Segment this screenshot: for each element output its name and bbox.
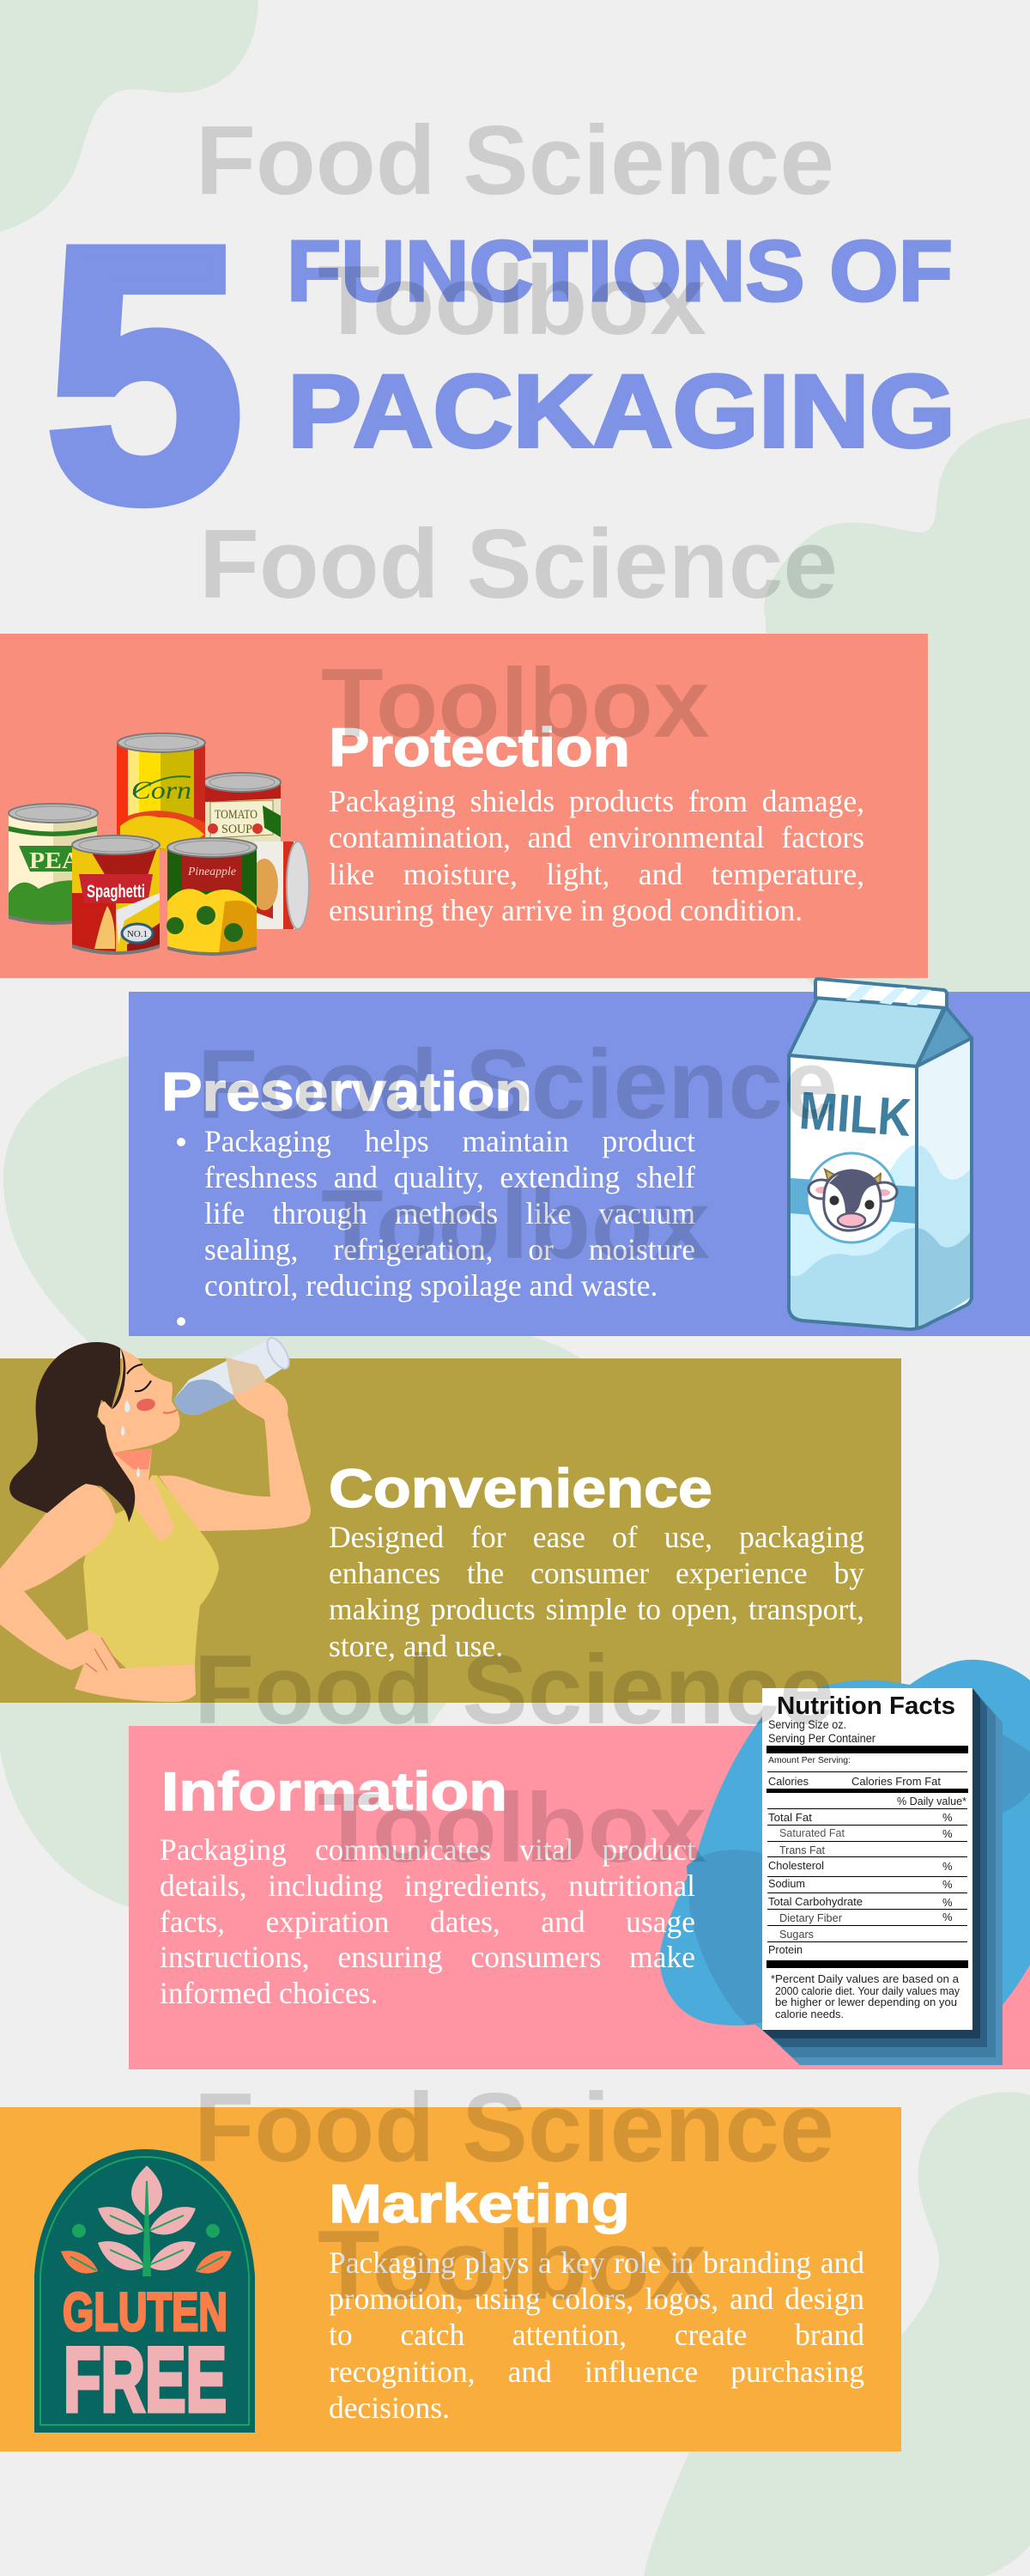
water bottle <box>173 1339 288 1415</box>
icon: gluten free badge <box>34 2149 255 2433</box>
icon: woman drinking from bottle <box>0 1337 311 1702</box>
label rows <box>768 1718 966 1956</box>
title line 2: PACKAGING <box>288 354 955 469</box>
bullet <box>177 1138 185 1146</box>
peas can <box>9 804 98 925</box>
watermark 9: Food Science <box>194 2074 834 2183</box>
watermark 7: Food Science <box>194 1636 834 1745</box>
body text: information: instructions, ensuring consumers make <box>160 1940 695 1974</box>
label title: Nutrition Facts <box>777 1692 955 1720</box>
body text: protection: contamination, and environmental factors <box>329 820 864 854</box>
label rows: Saturated Fat <box>779 1826 845 1839</box>
body text: preservation: life through methods like vacuum <box>204 1196 695 1230</box>
body text: preservation: control, reducing spoilage and waste. <box>204 1268 657 1303</box>
watermark 2: Toolbox <box>318 246 706 355</box>
mouth <box>163 1410 177 1413</box>
plant <box>61 2166 232 2276</box>
label rows: Calories <box>768 1775 809 1788</box>
label footnote: 2000 calorie diet. Your daily values may <box>775 1985 960 1997</box>
cheek <box>136 1397 156 1413</box>
FREE text: FREE <box>64 2328 227 2431</box>
panel: marketing <box>0 2107 901 2451</box>
watermark 8: Toolbox <box>318 1774 706 1883</box>
label footnote: calorie needs. <box>775 2008 844 2020</box>
peas can: PEAS <box>29 848 94 873</box>
body text: marketing: to catch attention, create brand <box>329 2318 864 2352</box>
label rows: Serving Per Container <box>768 1732 876 1745</box>
label card <box>762 1688 972 2030</box>
body text: information <box>160 1832 695 2010</box>
label rows: Cholesterol <box>768 1859 824 1872</box>
label footnote: be higher or lewer depending on you <box>775 1996 957 2008</box>
label rows: % Daily value* <box>897 1795 966 1807</box>
label rows: Calories From Fat <box>851 1775 941 1788</box>
empty bullet <box>177 1317 185 1326</box>
spaghetti can: Spaghetti <box>87 882 145 902</box>
sweat drops <box>121 1400 140 1477</box>
carton side <box>917 1038 972 1329</box>
badge arch <box>34 2149 255 2433</box>
label rows: Total Carbohydrate <box>768 1895 863 1908</box>
watermark 1: Food Science <box>196 106 834 216</box>
title line 1: FUNCTIONS OF <box>287 223 953 319</box>
body text: marketing <box>329 2245 864 2425</box>
panel: preservation <box>129 992 1030 1336</box>
label rows: % <box>942 1896 953 1909</box>
carton outlines <box>789 1038 972 1329</box>
label rows: % <box>942 1911 953 1923</box>
soup can on side <box>251 841 309 929</box>
body text: convenience <box>329 1520 864 1663</box>
body text: information: informed choices. <box>160 1976 378 2010</box>
face <box>98 1348 179 1453</box>
body text: preservation <box>204 1124 695 1303</box>
body text: marketing: decisions. <box>329 2391 450 2425</box>
label rows: Amount Per Serving: <box>768 1755 851 1765</box>
panel: protection <box>0 634 928 978</box>
label footnote: Percent Daily values are based on a <box>775 1973 959 1985</box>
label shadow <box>762 1688 1003 2065</box>
tomato soup can: SOUP <box>221 823 252 836</box>
body text: protection <box>329 784 864 927</box>
tank top <box>83 1475 219 1668</box>
neck <box>112 1449 152 1511</box>
spaghetti can <box>72 835 160 955</box>
GLUTEN text: GLUTEN <box>63 2282 227 2342</box>
label rows: Sodium <box>768 1877 805 1890</box>
label footnote <box>771 1973 960 2020</box>
nutrition facts label <box>762 1688 1003 2065</box>
corn can <box>117 733 205 852</box>
body text: convenience: enhances the consumer experience by <box>329 1556 864 1590</box>
body text: convenience: making products simple to open, transport, <box>329 1592 864 1626</box>
heading: convenience: Convenience <box>329 1459 712 1519</box>
label rows: Protein <box>768 1943 803 1956</box>
body text: protection: Packaging shields products from damage, <box>329 784 864 818</box>
hair <box>9 1342 135 1522</box>
label footnote: * <box>771 1973 775 1985</box>
body text: marketing: promotion, using colors, logos, and design <box>329 2281 864 2316</box>
body text: information: details, including ingredients, nutritional <box>160 1868 695 1903</box>
spaghetti can: NO.1 <box>127 930 148 939</box>
heading: information: Information <box>161 1762 507 1822</box>
corn can: Corn <box>131 776 191 805</box>
label rows: Sugars <box>779 1928 814 1941</box>
left arm and hand <box>0 1484 120 1672</box>
label rows: % <box>942 1827 953 1840</box>
panel: convenience <box>0 1358 901 1703</box>
body text: preservation: Packaging helps maintain product <box>204 1124 695 1158</box>
body text: information: Packaging communicates vital product <box>160 1832 695 1867</box>
title <box>46 173 955 574</box>
heading: marketing: Marketing <box>329 2174 630 2234</box>
label rows: % <box>942 1811 953 1824</box>
carton cap <box>815 979 947 1008</box>
label rows: Dietary Fiber <box>779 1911 843 1924</box>
heading: preservation: Preservation <box>161 1062 532 1122</box>
body text: information: facts, expiration dates, and usage <box>160 1905 695 1939</box>
pineapple can <box>167 838 257 956</box>
icon: stacked food cans <box>8 732 310 956</box>
label rows: Total Fat <box>768 1811 812 1824</box>
carton front <box>789 1055 917 1329</box>
label rows: % <box>942 1860 953 1873</box>
body text: preservation: sealing, refrigeration, or moisture <box>204 1232 695 1267</box>
carton gable <box>917 1007 972 1066</box>
carton roof <box>789 998 944 1066</box>
cow badge <box>807 1153 897 1242</box>
tomato soup can: TOMATO <box>215 808 258 822</box>
tomato soup can <box>203 773 281 846</box>
body text: preservation: freshness and quality, extending shelf <box>204 1160 695 1194</box>
pineapple can: Pineapple <box>187 866 236 878</box>
icon: blue blobs behind label <box>659 1659 1030 2032</box>
icon: milk carton <box>787 977 973 1331</box>
body text: convenience: store, and use. <box>329 1629 503 1663</box>
blue band <box>791 1178 916 1224</box>
body text: marketing: Packaging plays a key role in branding and <box>329 2245 864 2280</box>
MILK label: MILK <box>797 1081 913 1148</box>
big number 5: 5 <box>46 173 243 574</box>
right arm <box>159 1380 311 1531</box>
label rows: % <box>942 1878 953 1891</box>
body text: protection: ensuring they arrive in good condition. <box>329 893 803 927</box>
watermark 10: Toolbox <box>318 2211 706 2320</box>
label rules <box>766 1746 968 1968</box>
panel: information <box>129 1726 1030 2069</box>
label rows: Serving Size oz. <box>768 1718 846 1731</box>
watermark 3: Food Science <box>199 510 838 619</box>
watermark 5: Food Science <box>197 1030 838 1139</box>
watermarks <box>194 106 838 2320</box>
midriff <box>75 1663 196 1702</box>
eyebrow and eye <box>127 1364 151 1391</box>
body text: convenience: Designed for ease of use, packaging <box>329 1520 864 1554</box>
watermark 4: Toolbox <box>321 649 710 758</box>
body text: marketing: recognition, and influence purchasing <box>329 2354 864 2389</box>
heading: protection: Protection <box>329 718 630 778</box>
body text: protection: like moisture, light, and temperature, <box>329 857 864 891</box>
watermark 6: Toolbox <box>321 1170 710 1279</box>
label rows: Trans Fat <box>779 1844 825 1856</box>
